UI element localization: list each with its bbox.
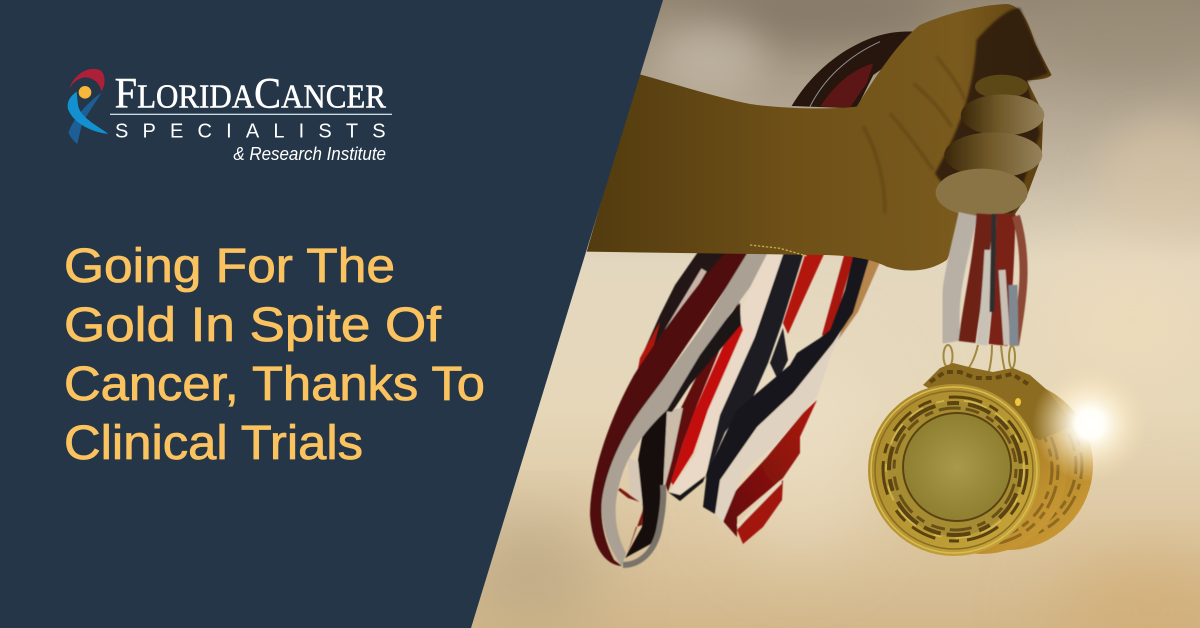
dark blue ribbon tail — [68, 93, 102, 144]
forearm and hand — [587, 4, 1052, 271]
medals — [868, 345, 1148, 556]
headline line 3: Cancer, Thanks To — [64, 358, 485, 411]
Research Institute tagline: & Research Institute — [233, 143, 386, 164]
middle medal — [897, 384, 1067, 554]
back medal — [923, 380, 1093, 550]
gold head — [79, 86, 91, 99]
upper left black and white ribbon — [634, 252, 730, 392]
small lens glint — [1015, 398, 1021, 406]
arm and fist — [587, 4, 1052, 271]
light blue swoosh — [68, 92, 108, 134]
sky background — [460, 0, 1200, 628]
ribbons tied behind the fist (top) — [792, 31, 915, 108]
Florida Cancer wordmark: FLORIDACANCER — [115, 70, 387, 118]
medal suspension crowns — [923, 363, 1075, 440]
large looping ribbon, maroon grey and black — [590, 252, 768, 566]
centre ribbon — [664, 252, 804, 501]
medal rings — [944, 345, 1015, 375]
headline — [64, 240, 485, 470]
headline line 2: Gold In Spite Of — [64, 299, 442, 352]
headline line 4: Clinical Trials — [64, 417, 363, 470]
sun flare at the medal edge — [1032, 366, 1148, 482]
shadow inside the thumb and fist — [935, 8, 1048, 213]
headline line 1: Going For The — [64, 240, 395, 293]
sunlit hairs along the wrist — [750, 245, 807, 256]
Specialists wordmark: SPECIALISTS — [115, 120, 386, 142]
skin creases — [863, 57, 965, 213]
fingers — [936, 75, 1044, 217]
hanging ribbon loops — [590, 252, 880, 566]
narrow red ribbon ends — [783, 252, 855, 339]
navy diagonal panel — [0, 0, 663, 628]
divider line — [110, 114, 392, 115]
right ribbon with lower loop — [703, 256, 880, 544]
ribbons held in the fist above the medals — [950, 214, 1024, 346]
logo icon — [68, 69, 108, 144]
logo: Florida Cancer Specialists and Research Institute — [68, 69, 392, 164]
plain centre disc — [902, 412, 1012, 522]
red arc — [69, 69, 105, 92]
front medal — [868, 384, 1040, 556]
photo: medals held up in a fist against a sunset sky — [460, 0, 1200, 628]
